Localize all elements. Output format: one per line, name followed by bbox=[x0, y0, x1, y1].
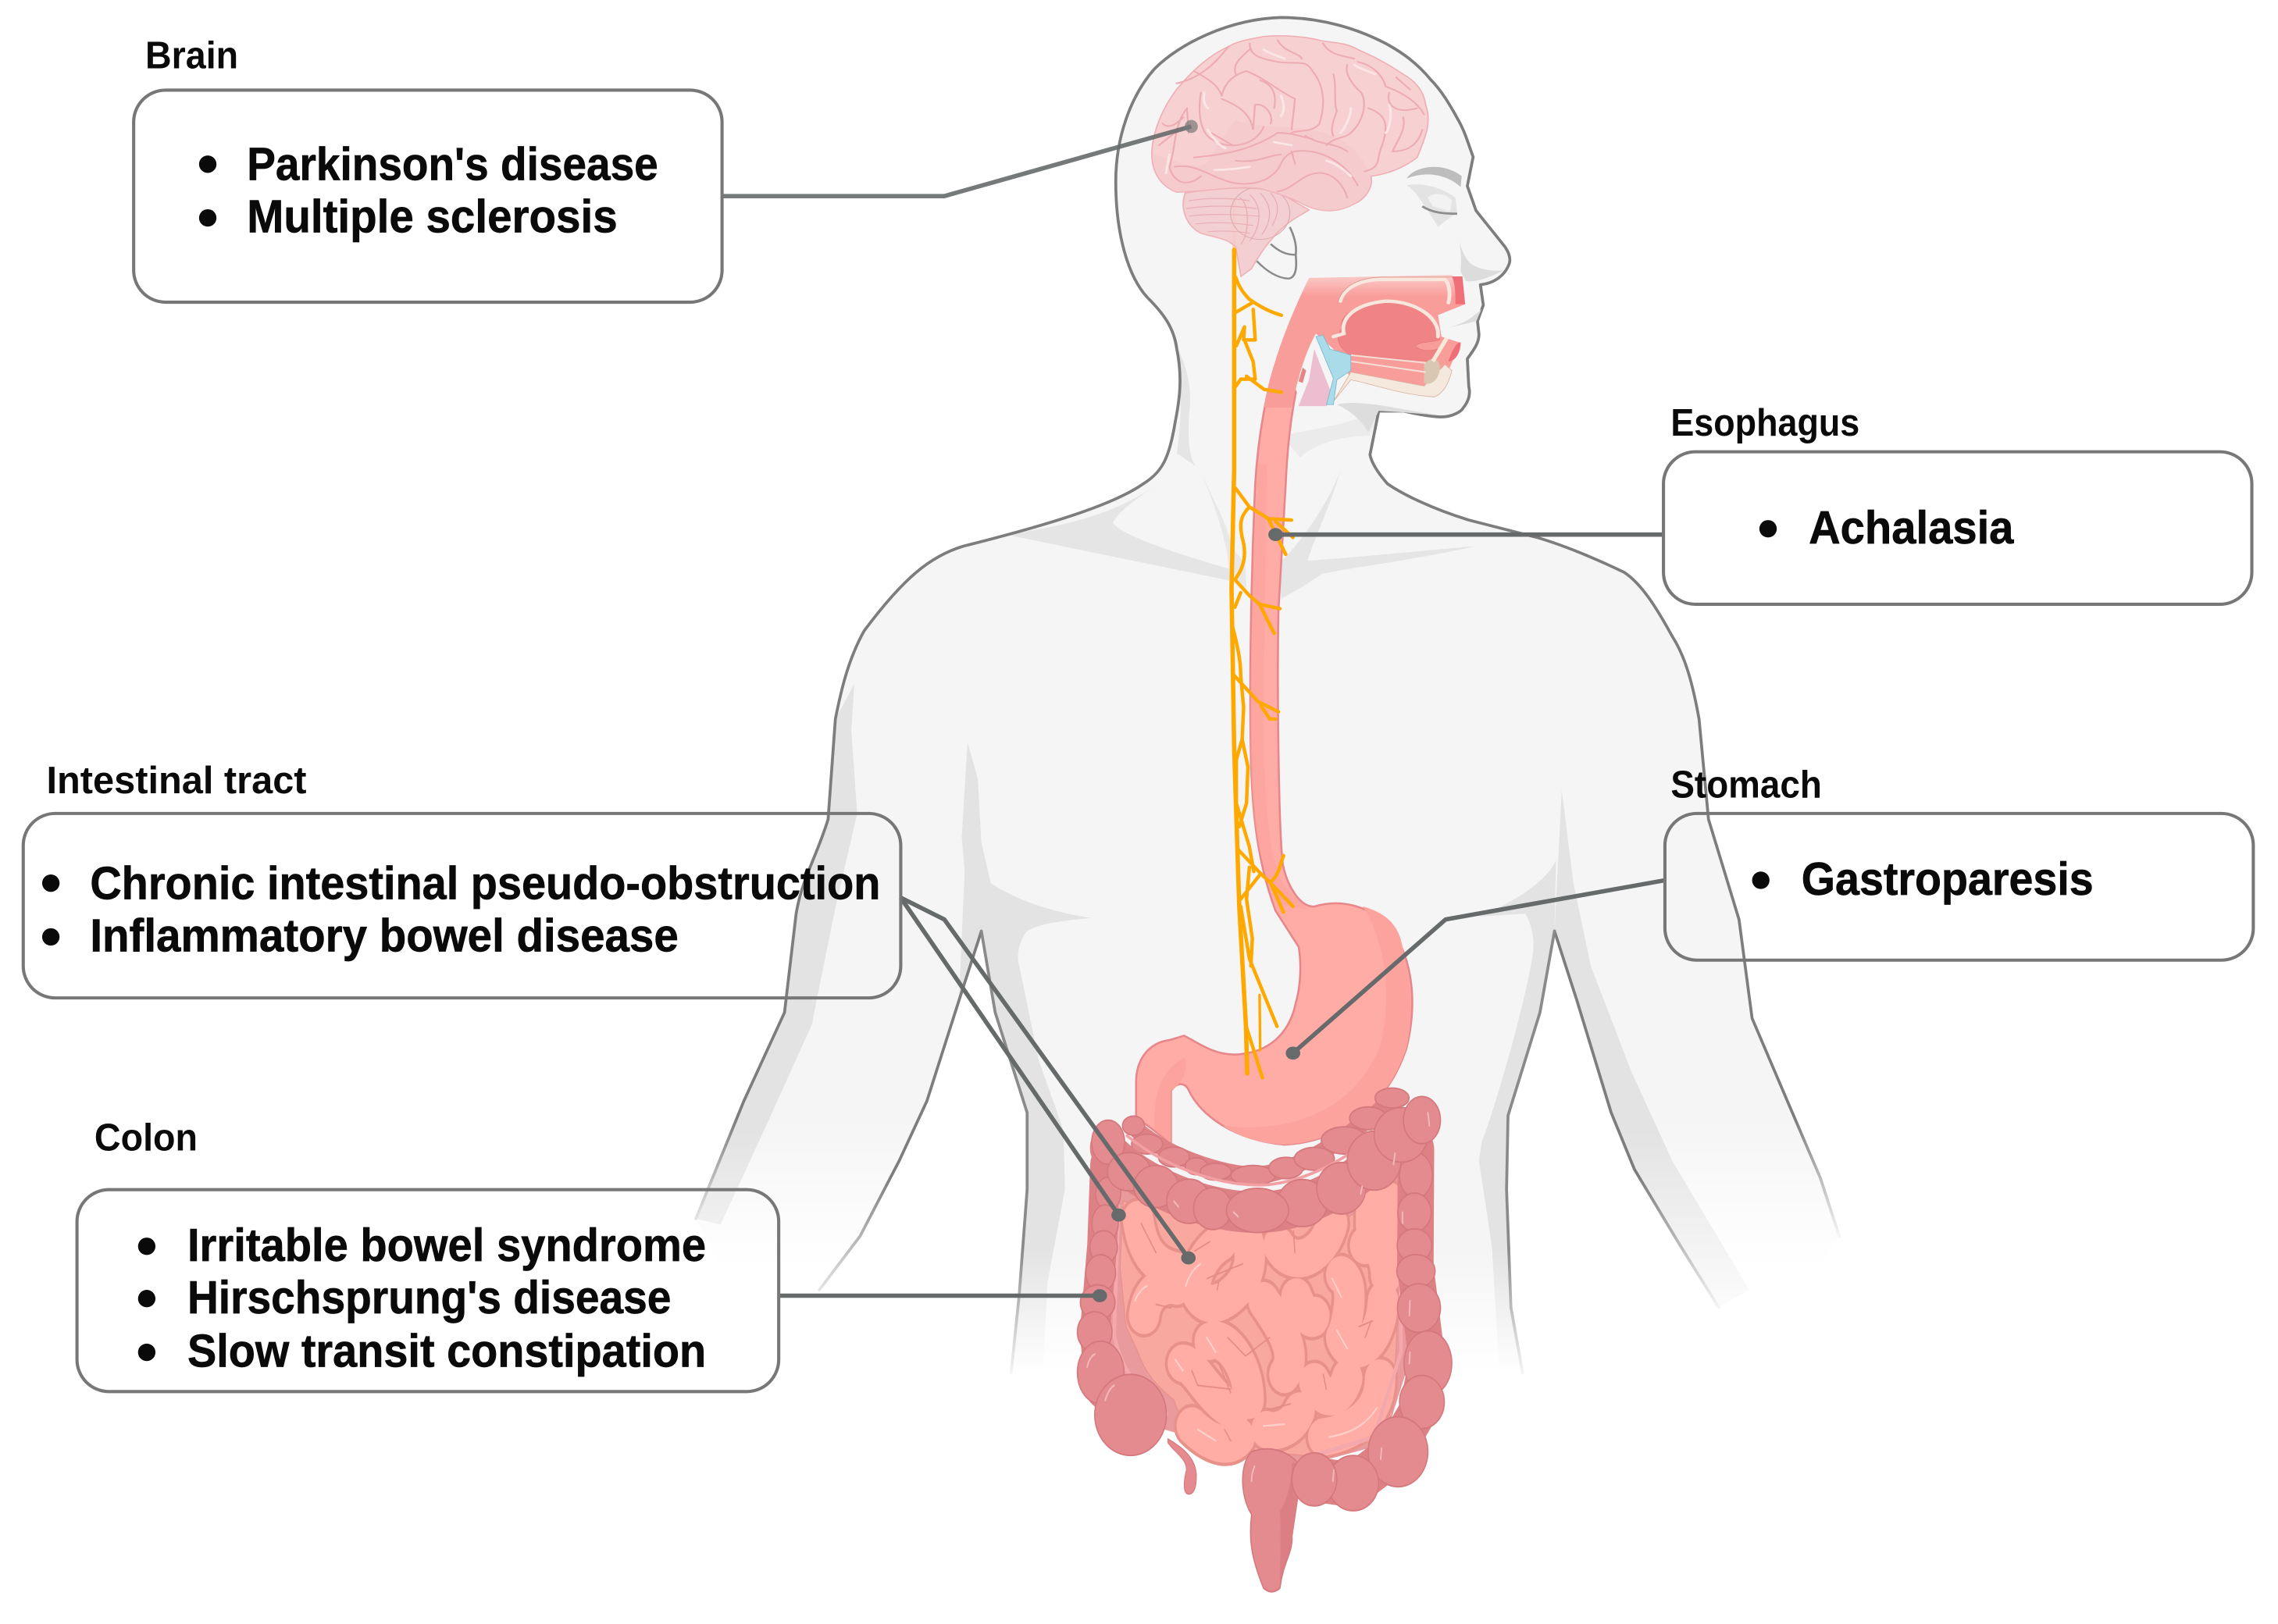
eyebrow bbox=[1406, 167, 1462, 187]
rectum bbox=[1242, 1449, 1298, 1592]
heading: intestinal tract: Intestinal tract bbox=[47, 759, 307, 802]
eyelid bbox=[1422, 206, 1457, 214]
arm shading bbox=[696, 684, 1749, 1307]
cerebellum and brainstem bbox=[1183, 188, 1309, 276]
vagus nerve upper trunk (faint behind brain) bbox=[1233, 198, 1235, 250]
small intestine bbox=[1120, 1187, 1398, 1460]
torso lower fill bbox=[1011, 1104, 1523, 1373]
floor of mouth lines bbox=[1351, 355, 1426, 372]
leader: intestinal tract bbox=[900, 898, 1196, 1264]
mesentery folds bbox=[1141, 1223, 1373, 1441]
ear bbox=[1257, 227, 1296, 279]
abdominal backing tissue bbox=[1105, 1142, 1410, 1463]
eye socket shading bbox=[1406, 184, 1457, 227]
transverse colon back band bbox=[1132, 1098, 1395, 1175]
transverse colon back haustra bbox=[1122, 1088, 1409, 1185]
mesentery side strips bbox=[1114, 1187, 1401, 1455]
transverse colon front band bbox=[1107, 1124, 1419, 1213]
esophagus and stomach bbox=[1136, 356, 1412, 1145]
teeth and gum bbox=[1424, 359, 1440, 384]
callout: brain: Parkinson's disease bbox=[247, 138, 658, 191]
appendix bbox=[1168, 1439, 1196, 1494]
fundus shade bbox=[1223, 906, 1411, 1145]
transverse colon front haustra bbox=[1092, 1096, 1441, 1233]
ascending and descending colon band bbox=[1095, 1149, 1428, 1485]
callout: brain bbox=[134, 34, 722, 302]
loop outlines bbox=[1138, 1201, 1389, 1444]
callout: esophagus bbox=[1663, 401, 2252, 604]
callout: colon: Hirschsprung's disease bbox=[187, 1271, 671, 1323]
tongue bbox=[1339, 301, 1440, 361]
vagus nerve bbox=[1232, 250, 1293, 1077]
gyri bbox=[1159, 40, 1424, 198]
callout: colon bbox=[77, 1116, 779, 1391]
heading: brain: Brain bbox=[145, 34, 238, 77]
body outline bbox=[696, 17, 1839, 1373]
neck and collar shading bbox=[1007, 337, 1476, 599]
human body silhouette bbox=[696, 17, 1839, 1373]
intestine base bbox=[1120, 1187, 1398, 1460]
heading: colon: Colon bbox=[94, 1116, 198, 1159]
duodenum shade bbox=[1154, 1057, 1185, 1143]
lower jaw bbox=[1333, 365, 1452, 401]
leader: stomach bbox=[1285, 880, 1665, 1060]
leader: brain bbox=[722, 120, 1198, 196]
loop fills bbox=[1138, 1201, 1389, 1444]
cerebellum folds bbox=[1186, 187, 1290, 244]
heading: stomach: Stomach bbox=[1670, 763, 1822, 806]
callout: stomach bbox=[1665, 763, 2253, 960]
transverse mesentery strip bbox=[1126, 1109, 1404, 1185]
palate bbox=[1340, 280, 1449, 303]
leader: colon bbox=[779, 1289, 1107, 1302]
temporal lobe shade bbox=[1153, 120, 1371, 211]
brain bbox=[1152, 36, 1428, 276]
leader: esophagus bbox=[1268, 528, 1663, 541]
callout: colon: Irritable bowel syndrome bbox=[187, 1219, 706, 1271]
heading: esophagus: Esophagus bbox=[1670, 401, 1859, 444]
larynx bbox=[1299, 349, 1333, 406]
callout: stomach: Gastroparesis bbox=[1802, 853, 2094, 905]
face details bbox=[1257, 167, 1504, 433]
callout: brain: Multiple sclerosis bbox=[247, 191, 618, 243]
nasal tissue bbox=[1452, 276, 1465, 304]
pharynx and mouth bbox=[1264, 275, 1465, 408]
esophagus inner band bbox=[1250, 465, 1307, 910]
callout: colon: Slow transit constipation bbox=[187, 1325, 706, 1377]
callout: intestinal tract bbox=[23, 759, 900, 998]
callout: esophagus: Achalasia bbox=[1809, 501, 2014, 554]
haustra highlights bbox=[1087, 1113, 1429, 1481]
gyri highlights bbox=[1166, 49, 1391, 176]
colon bbox=[1078, 1088, 1452, 1592]
ascending and descending haustra bbox=[1078, 1152, 1452, 1511]
nose and lip shading bbox=[1459, 241, 1504, 281]
torso side shading bbox=[959, 743, 1556, 1373]
callout leader lines bbox=[722, 120, 1665, 1302]
loop highlights bbox=[1135, 1264, 1377, 1441]
callout: intestinal tract: Chronic intestinal pseudo-obstruction bbox=[90, 857, 880, 910]
oral cavity bbox=[1264, 275, 1465, 408]
cerebrum bbox=[1152, 36, 1428, 211]
callout: intestinal tract: Inflammatory bowel disease bbox=[90, 910, 679, 962]
